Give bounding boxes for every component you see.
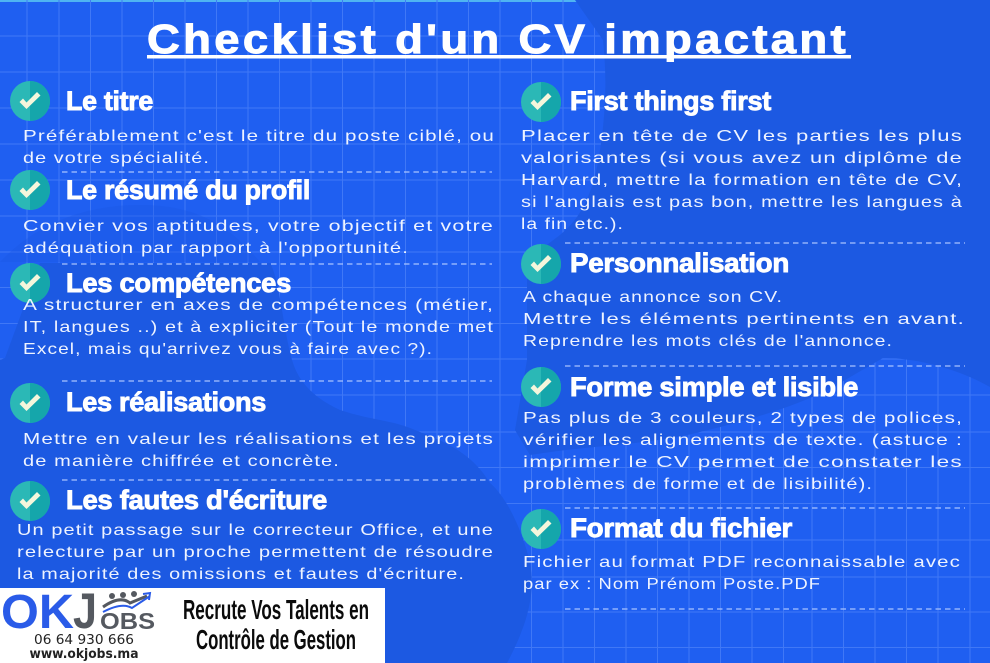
text: Les fautes d'écriture	[17, 522, 494, 583]
section: Les réalisations	[10, 383, 494, 470]
text: Le résumé du profil	[23, 218, 494, 257]
text: Les compétences: A structurer en axes de compétences (métier,	[23, 297, 494, 314]
section: Le résumé du profil	[10, 170, 494, 257]
text: Le résumé du profil: Convier vos aptitudes, votre objectif et votre	[23, 218, 494, 235]
text: Le résumé du profil: adéquation par rapport à l'opportunité.	[23, 240, 409, 257]
text: Les fautes d'écriture: la majorité des omissions et fautes d'écriture.	[17, 566, 465, 583]
icon: check	[521, 82, 561, 122]
recruiting slogan: Recrute Vos Talents en	[183, 594, 369, 625]
heading: First things first: First things first	[570, 86, 771, 116]
text: Personnalisation: Mettre les éléments pertinents en avant.	[523, 311, 965, 328]
text: Format du fichier: Fichier au format PDF reconnaissable avec	[523, 554, 961, 571]
text: Les compétences: IT, langues ..) et à expliciter (Tout le monde met	[23, 319, 494, 336]
text: Forme simple et lisible: Pas plus de 3 couleurs, 2 types de polices,	[523, 410, 963, 427]
text: Les réalisations: Mettre en valeur les réalisations et les projets	[23, 431, 494, 448]
logo: OKJobs: OBS	[100, 608, 155, 634]
icon: check	[10, 383, 50, 423]
icon: check	[10, 81, 50, 121]
phone number: 06 64 930 666	[34, 632, 134, 648]
icon: check	[521, 367, 561, 407]
heading: Forme simple et lisible: Forme simple et lisible	[570, 372, 858, 402]
text: Les fautes d'écriture: Un petit passage sur le correcteur Office, et une	[17, 522, 494, 539]
text: Le titre	[23, 128, 495, 167]
heading: Personnalisation: Personnalisation	[570, 248, 789, 278]
text: First things first: Harvard, mettre la formation en tête de CV,	[521, 172, 963, 189]
section: Format du fichier	[521, 509, 961, 593]
text: Les réalisations	[23, 431, 494, 470]
recruiting slogan	[183, 594, 369, 655]
section: Les fautes d'écriture	[10, 481, 494, 583]
text: First things first: la fin etc.).	[521, 216, 624, 233]
heading: Les fautes d'écriture: Les fautes d'écriture	[66, 485, 327, 515]
text: First things first: Placer en tête de CV les parties les plus	[521, 128, 963, 145]
title: Checklist d'un CV impactant	[147, 16, 849, 62]
website: www.okjobs.ma	[30, 647, 138, 662]
logo: OKJobs: J	[73, 583, 97, 639]
text: Les fautes d'écriture: relecture par un proche permettent de résoudre	[17, 544, 494, 561]
text: Le titre: Préférablement c'est le titre du poste ciblé, ou	[23, 128, 495, 145]
text: Format du fichier	[523, 554, 961, 593]
icon: check	[521, 509, 561, 549]
section: First things first	[521, 82, 963, 233]
icon: check	[10, 263, 50, 303]
heading: Les réalisations: Les réalisations	[66, 387, 266, 417]
logo: OKJobs: OK	[1, 586, 74, 639]
recruiting slogan: Contrôle de Gestion	[196, 624, 356, 655]
icon: check	[521, 244, 561, 284]
text: Les compétences	[23, 297, 494, 358]
text: Les réalisations: de manière chiffrée et concrète.	[23, 453, 340, 470]
section: Le titre	[10, 81, 495, 167]
heading: Les compétences: Les compétences	[66, 268, 291, 298]
text: Forme simple et lisible: vérifier les alignements de texte. (astuce :	[523, 432, 963, 449]
heading: Le résumé du profil: Le résumé du profil	[66, 175, 310, 205]
text: Forme simple et lisible	[523, 410, 963, 493]
heading: Le titre: Le titre	[66, 86, 153, 116]
section: Forme simple et lisible	[521, 367, 963, 493]
panel: OKJobs advertisement	[0, 583, 385, 663]
text: First things first: valorisantes (si vous avez un diplôme de	[521, 150, 963, 167]
text: Personnalisation: A chaque annonce son CV.	[523, 289, 783, 306]
text: Le titre: de votre spécialité.	[23, 150, 210, 167]
heading: Format du fichier: Format du fichier	[570, 513, 793, 543]
text: Format du fichier: par ex : Nom Prénom Poste.PDF	[523, 576, 821, 593]
section: Les compétences	[10, 263, 494, 358]
text: Personnalisation	[523, 289, 965, 350]
section: Personnalisation	[521, 244, 965, 350]
text: Forme simple et lisible: problèmes de forme et de lisibilité).	[523, 476, 873, 493]
text: Personnalisation: Reprendre les mots clés de l'annonce.	[523, 333, 893, 350]
text: Forme simple et lisible: imprimer le CV permet de constater les	[523, 454, 963, 471]
text: First things first	[521, 128, 963, 233]
icon: check	[10, 481, 50, 521]
icon: check	[10, 170, 50, 210]
text: Les compétences: Excel, mais qu'arrivez vous à faire avec ?).	[23, 341, 433, 358]
logo: OKJobs	[1, 583, 155, 639]
text: First things first: si l'anglais est pas bon, mettre les langues à	[521, 194, 963, 211]
